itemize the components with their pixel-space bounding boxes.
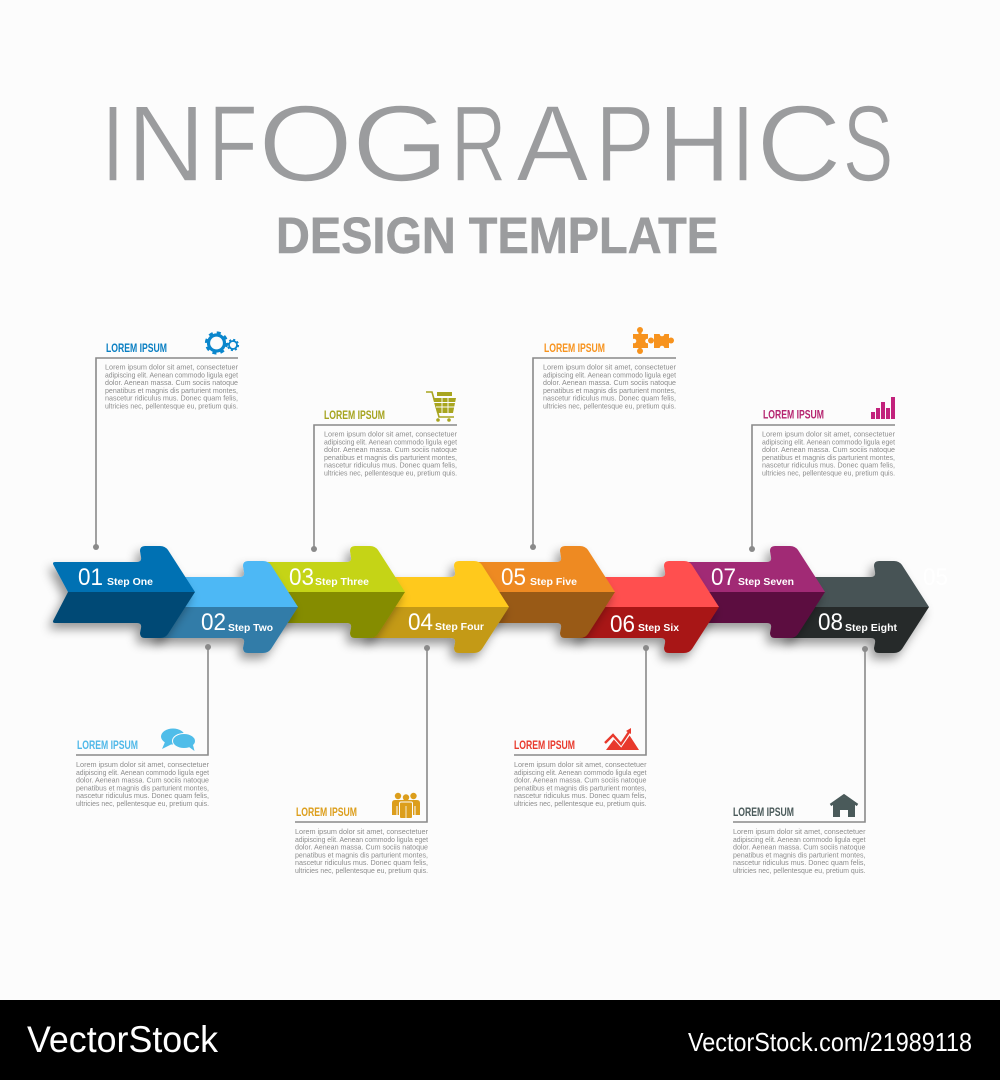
panel: step 3 callout	[311, 392, 458, 552]
step label 3	[289, 564, 369, 591]
title: O	[258, 83, 353, 205]
text block: dolor. Aenean massa. Cum sociis natoque	[543, 378, 676, 387]
step label 2: 02	[201, 609, 226, 636]
text block: dolor. Aenean massa. Cum sociis natoque	[762, 445, 895, 454]
text block: ultricies nec, pellentesque eu, pretium quis.	[762, 468, 895, 478]
text block: penatibus et magnis dis parturient montes,	[76, 783, 209, 792]
step label 7: Step Seven	[738, 576, 794, 588]
icon: rising line over mountains	[605, 728, 639, 750]
heading: LOREM IPSUM	[77, 740, 138, 752]
text block: ultricies nec, pellentesque eu, pretium quis.	[105, 402, 238, 410]
arrow 2	[156, 561, 298, 653]
text block: nascetur ridiculus mus. Donec quam felis,	[543, 394, 676, 403]
step label 8: Step Eight	[845, 622, 897, 634]
arrow 8	[787, 561, 929, 653]
text block: nascetur ridiculus mus. Donec quam felis,	[105, 394, 238, 403]
step label 3: 03	[289, 564, 314, 591]
panel: step 4 callout	[295, 645, 430, 875]
text block: Lorem ipsum dolor sit amet, consectetuer	[762, 430, 896, 438]
text block: dolor. Aenean massa. Cum sociis natoque	[295, 843, 428, 852]
panel: step 5 callout	[530, 327, 677, 550]
step label 5: 05	[501, 564, 526, 591]
text block: penatibus et magnis dis parturient montes,	[762, 453, 895, 462]
heading: LOREM IPSUM	[106, 343, 167, 355]
arrow 4	[367, 561, 509, 653]
heading: LOREM IPSUM	[544, 343, 605, 355]
text block: nascetur ridiculus mus. Donec quam felis,	[76, 791, 209, 800]
text block: ultricies nec, pellentesque eu, pretium quis.	[324, 468, 457, 478]
step label 2: Step Two	[228, 622, 273, 634]
step label 8: 08	[818, 609, 843, 636]
step label 8	[818, 609, 897, 636]
arrow 7	[683, 546, 825, 638]
text block: nascetur ridiculus mus. Donec quam felis,	[733, 858, 866, 867]
arrow 6	[577, 561, 719, 653]
step label 1: 01	[78, 564, 103, 591]
title: S	[843, 83, 894, 205]
icon: group of people	[392, 793, 420, 818]
step label 4: Step Four	[435, 621, 484, 633]
title: P	[595, 83, 655, 205]
text block	[733, 827, 866, 875]
text block	[543, 362, 677, 410]
step label 2	[201, 609, 273, 636]
text block: dolor. Aenean massa. Cum sociis natoque	[514, 776, 646, 785]
text block	[324, 430, 458, 478]
step label 5: Step Five	[530, 576, 577, 588]
text block: ultricies nec, pellentesque eu, pretium quis.	[543, 402, 676, 410]
panel: step 7 callout	[749, 397, 896, 552]
heading: LOREM IPSUM	[733, 807, 794, 819]
text block: ultricies nec, pellentesque eu, pretium quis.	[295, 866, 428, 875]
icon: speech bubbles	[161, 728, 196, 751]
text block	[514, 760, 647, 808]
panel: step 6 callout	[514, 645, 649, 808]
step label 6: Step Six	[638, 622, 679, 634]
step label 7: 07	[711, 564, 736, 591]
text block	[76, 760, 210, 808]
subtitle: DESIGN TEMPLATE	[276, 207, 718, 264]
text block: adipiscing elit. Aenean commodo ligula eget	[733, 835, 866, 844]
text block: nascetur ridiculus mus. Donec quam felis,	[295, 858, 428, 867]
text block	[105, 362, 239, 410]
ghost number: 05: 05	[923, 564, 948, 591]
text block: Lorem ipsum dolor sit amet, consectetuer	[105, 362, 239, 372]
text block: ultricies nec, pellentesque eu, pretium quis.	[514, 799, 646, 808]
panel: step 8 callout	[733, 646, 868, 875]
step label 1: Step One	[107, 576, 153, 588]
step label 3: Step Three	[315, 576, 369, 588]
text block: ultricies nec, pellentesque eu, pretium quis.	[733, 866, 866, 875]
text block: Lorem ipsum dolor sit amet, consectetuer	[76, 760, 210, 769]
step label 6	[610, 611, 679, 638]
heading: LOREM IPSUM	[324, 410, 385, 422]
heading: LOREM IPSUM	[763, 410, 824, 422]
text block: dolor. Aenean massa. Cum sociis natoque	[733, 843, 866, 852]
text block: adipiscing elit. Aenean commodo ligula eget	[324, 437, 457, 446]
text block: penatibus et magnis dis parturient montes,	[105, 386, 238, 395]
title: I	[731, 83, 755, 205]
title: C	[756, 83, 842, 205]
icon: puzzle pieces	[632, 327, 674, 354]
footer image id: VectorStock.com/21989118	[688, 1027, 972, 1057]
title: F	[208, 83, 258, 205]
footer logo text: VectorStock	[27, 1019, 218, 1060]
title: I	[101, 83, 125, 205]
text block: adipiscing elit. Aenean commodo ligula eget	[514, 768, 646, 777]
text block: dolor. Aenean massa. Cum sociis natoque	[324, 445, 457, 454]
arrow 1	[53, 546, 195, 638]
text block: Lorem ipsum dolor sit amet, consectetuer	[324, 430, 458, 438]
text block: adipiscing elit. Aenean commodo ligula eget	[105, 370, 238, 379]
text block: Lorem ipsum dolor sit amet, consectetuer	[543, 362, 677, 372]
text block: dolor. Aenean massa. Cum sociis natoque	[105, 378, 238, 387]
icon: bar chart	[871, 397, 895, 419]
arrow 5	[473, 546, 615, 638]
text block: adipiscing elit. Aenean commodo ligula eget	[76, 768, 209, 777]
step label 1	[78, 564, 153, 591]
text block: nascetur ridiculus mus. Donec quam felis,	[324, 461, 457, 470]
title: R	[451, 83, 507, 205]
title: A	[516, 83, 589, 205]
text block: penatibus et magnis dis parturient montes,	[543, 386, 676, 395]
panel: step 1 callout	[93, 333, 239, 550]
arrow 3	[263, 546, 405, 638]
step label 7	[711, 564, 794, 591]
heading: LOREM IPSUM	[296, 807, 357, 819]
step label 4: 04	[408, 609, 433, 636]
icon: gears	[206, 333, 238, 353]
text block: penatibus et magnis dis parturient montes,	[295, 850, 428, 859]
text block	[295, 827, 429, 875]
heading: LOREM IPSUM	[514, 740, 575, 752]
text block	[762, 430, 896, 478]
step label 5	[501, 564, 577, 591]
title: H	[658, 83, 730, 205]
text block: Lorem ipsum dolor sit amet, consectetuer	[733, 827, 866, 836]
text block: adipiscing elit. Aenean commodo ligula eget	[295, 835, 428, 844]
text block: Lorem ipsum dolor sit amet, consectetuer	[295, 827, 429, 836]
title: G	[352, 83, 449, 205]
footer bar	[0, 1000, 1000, 1080]
text block: dolor. Aenean massa. Cum sociis natoque	[76, 776, 209, 785]
text block: adipiscing elit. Aenean commodo ligula eget	[543, 370, 676, 379]
text block: nascetur ridiculus mus. Donec quam felis,	[762, 461, 895, 470]
text block: penatibus et magnis dis parturient montes,	[733, 850, 866, 859]
panel: step 2 callout	[76, 644, 211, 808]
step label 4	[408, 609, 484, 636]
icon: shopping cart	[426, 392, 456, 422]
text block: penatibus et magnis dis parturient montes,	[514, 783, 646, 792]
text block: ultricies nec, pellentesque eu, pretium quis.	[76, 799, 209, 808]
text block: adipiscing elit. Aenean commodo ligula eget	[762, 437, 895, 446]
step label 6: 06	[610, 611, 635, 638]
icon: house	[830, 796, 858, 817]
title: N	[127, 83, 205, 205]
text block: penatibus et magnis dis parturient montes,	[324, 453, 457, 462]
text block: nascetur ridiculus mus. Donec quam felis,	[514, 791, 646, 800]
text block: Lorem ipsum dolor sit amet, consectetuer	[514, 760, 647, 769]
